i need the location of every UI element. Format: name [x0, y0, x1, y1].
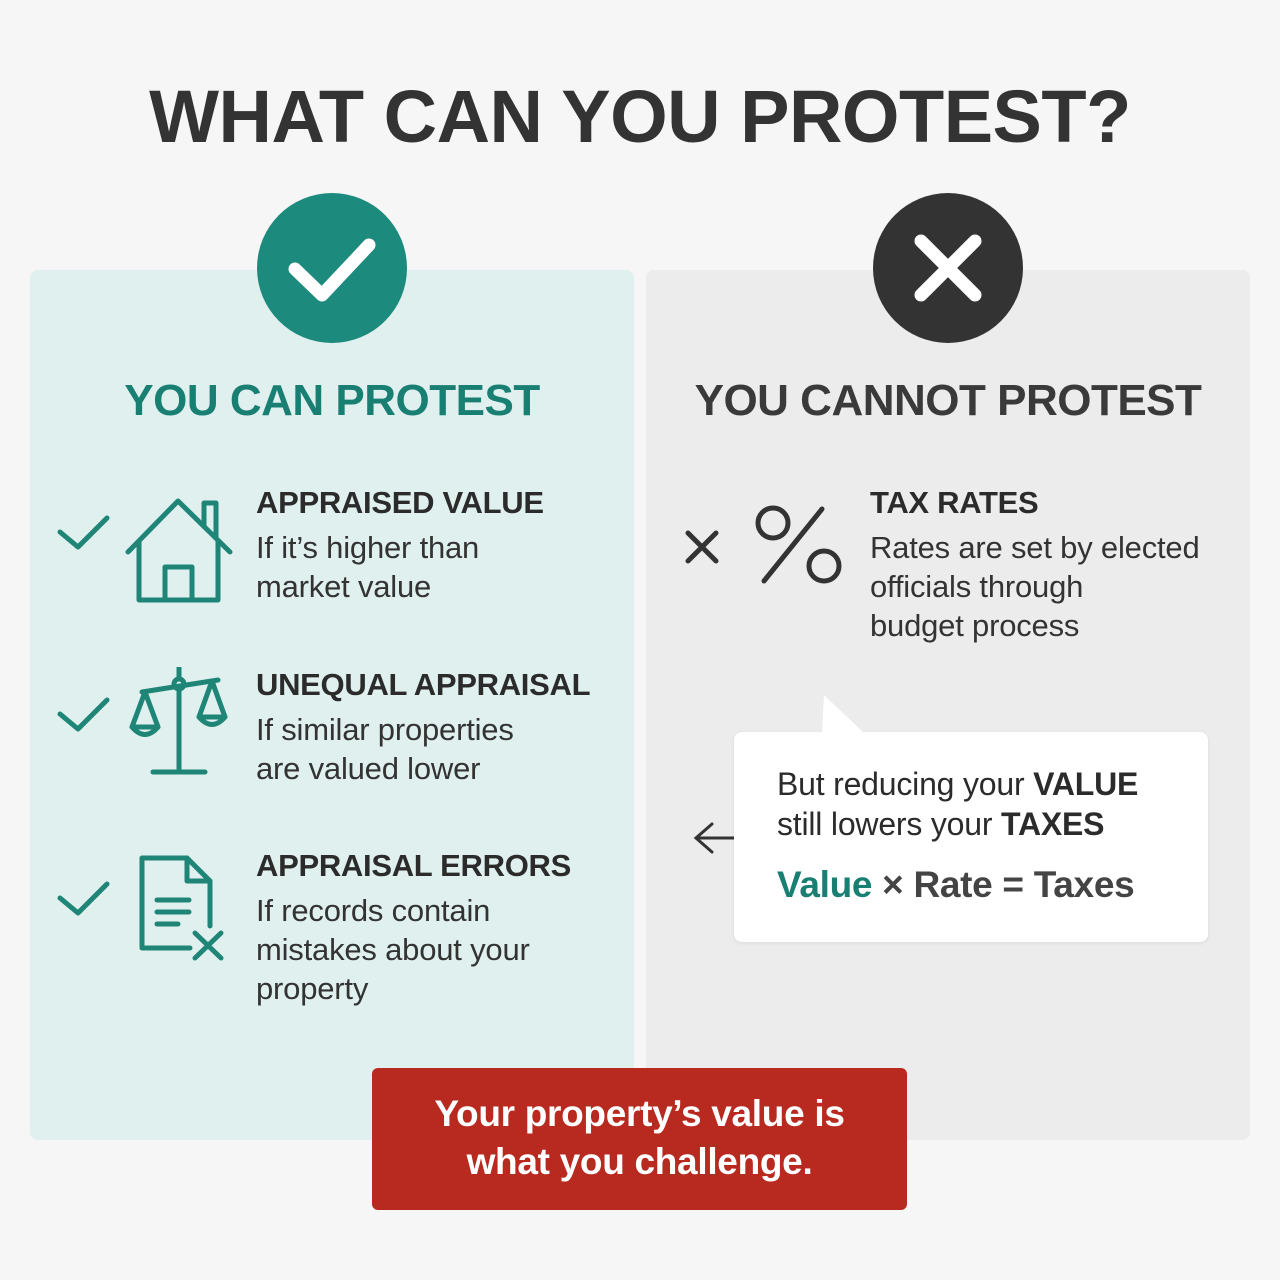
icon: x circle	[873, 193, 1023, 343]
item: tax rates	[686, 485, 1200, 643]
item: appraised value: market value	[256, 569, 431, 604]
item: appraisal errors: property	[256, 971, 368, 1006]
item: unequal appraisal: are valued lower	[256, 751, 480, 786]
callout: But reducing your VALUE	[777, 766, 1138, 802]
item: unequal appraisal: UNEQUAL APPRAISAL	[256, 667, 590, 702]
item: appraised value: APPRAISED VALUE	[256, 485, 544, 520]
item: appraisal errors: mistakes about your	[256, 932, 530, 967]
heading: you can protest: YOU CAN PROTEST	[124, 376, 540, 425]
item: tax rates: Rates are set by elected	[870, 530, 1200, 565]
item: appraisal errors: APPRAISAL ERRORS	[256, 848, 571, 883]
heading: you cannot protest: YOU CANNOT PROTEST	[695, 376, 1201, 425]
item: tax rates: budget process	[870, 608, 1079, 643]
item: unequal appraisal: If similar properties	[256, 712, 514, 747]
callout: still lowers your TAXES	[777, 806, 1104, 842]
arrow	[694, 822, 734, 854]
item: appraised value: If it’s higher than	[256, 530, 479, 565]
item: tax rates: officials through	[870, 569, 1083, 604]
callout: Value × Rate = Taxes	[777, 864, 1134, 905]
callout	[734, 732, 1208, 942]
callout: conclusion: what you challenge.	[467, 1141, 812, 1182]
item: appraisal errors: If records contain	[256, 893, 490, 928]
item: appraised value	[58, 485, 544, 604]
item: appraisal errors	[58, 848, 571, 1006]
icon: check circle	[257, 193, 407, 343]
item: tax rates: TAX RATES	[870, 485, 1038, 520]
item: unequal appraisal	[58, 667, 590, 786]
callout: conclusion	[372, 1068, 907, 1210]
panel: can protest	[30, 270, 634, 1140]
panel: cannot protest	[646, 270, 1250, 1140]
title: WHAT CAN YOU PROTEST?	[149, 75, 1131, 158]
callout: conclusion: Your property’s value is	[434, 1093, 845, 1134]
